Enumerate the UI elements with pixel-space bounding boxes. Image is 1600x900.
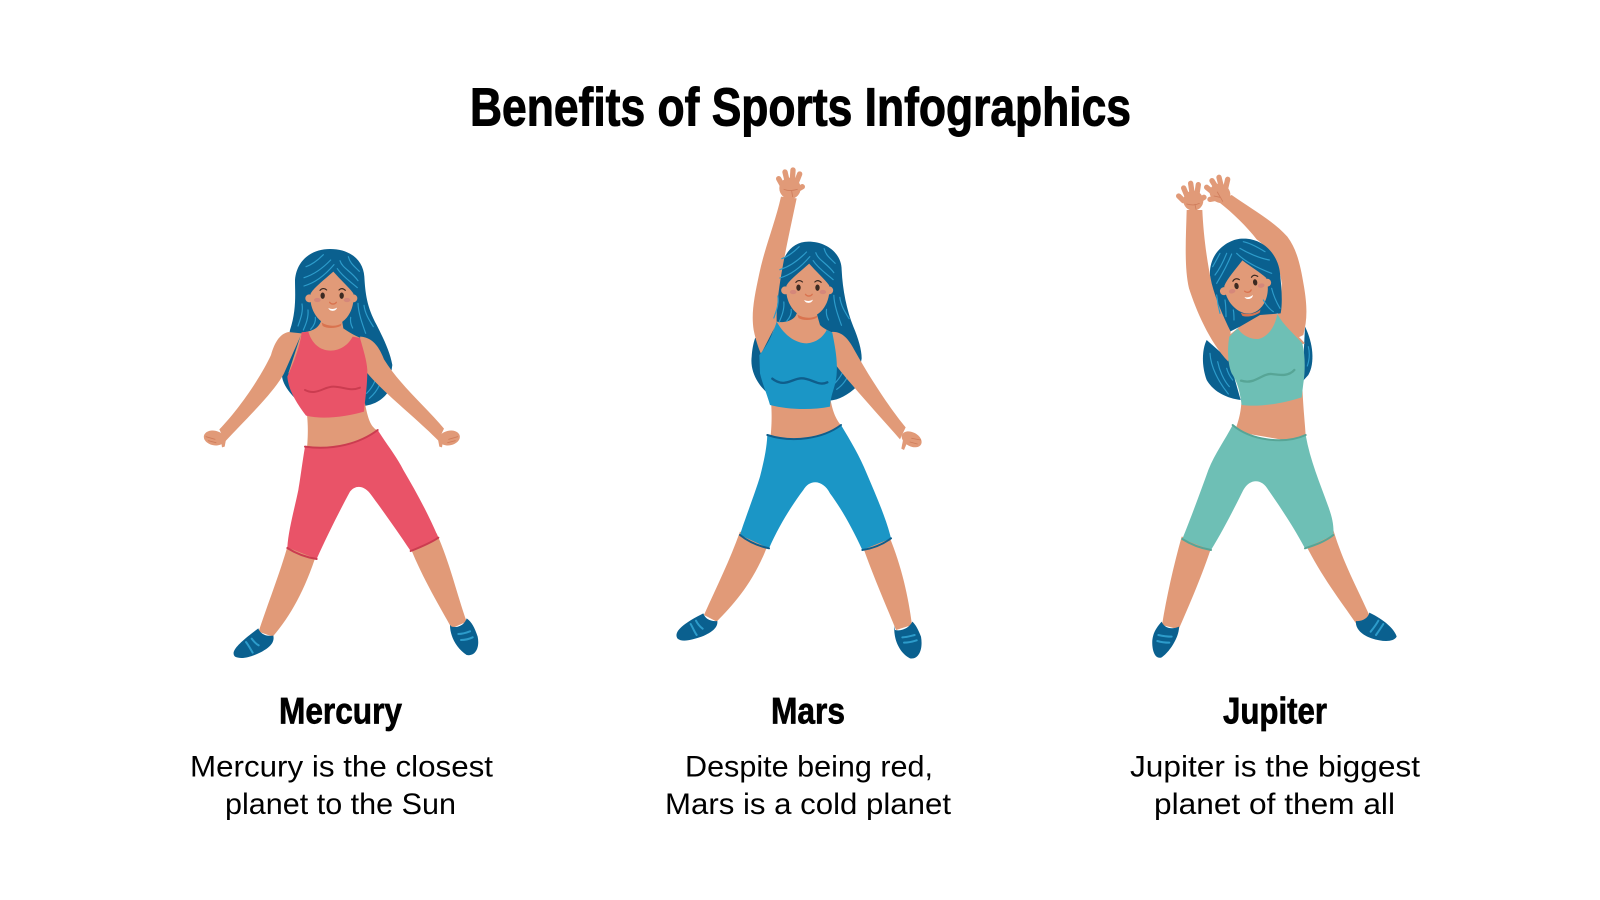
heading: Mercury: Mercury [279, 690, 402, 732]
column: Mars text [665, 690, 952, 821]
text: Mars description [665, 750, 952, 821]
text: Mars description: Mars is a cold planet [665, 788, 952, 821]
text: Mercury description: Mercury is the closest [190, 750, 494, 784]
column: Jupiter text [1130, 690, 1421, 821]
text: Jupiter description [1130, 750, 1421, 821]
figure: Jupiter athlete in teal [1152, 177, 1397, 658]
figure: Mars athlete in blue [676, 170, 924, 659]
text: Mercury description [190, 750, 494, 821]
figure: Mercury athlete in pink [202, 249, 478, 658]
text: Mars description: Despite being red, [685, 750, 933, 784]
heading: Jupiter: Jupiter [1223, 690, 1327, 732]
column: Mercury text [190, 690, 494, 821]
title: Benefits of Sports Infographics [470, 78, 1131, 138]
text: Jupiter description: Jupiter is the biggest [1130, 750, 1421, 784]
heading: Mars: Mars [771, 690, 845, 732]
text: Jupiter description: planet of them all [1154, 788, 1395, 821]
text: Mercury description: planet to the Sun [225, 788, 456, 821]
